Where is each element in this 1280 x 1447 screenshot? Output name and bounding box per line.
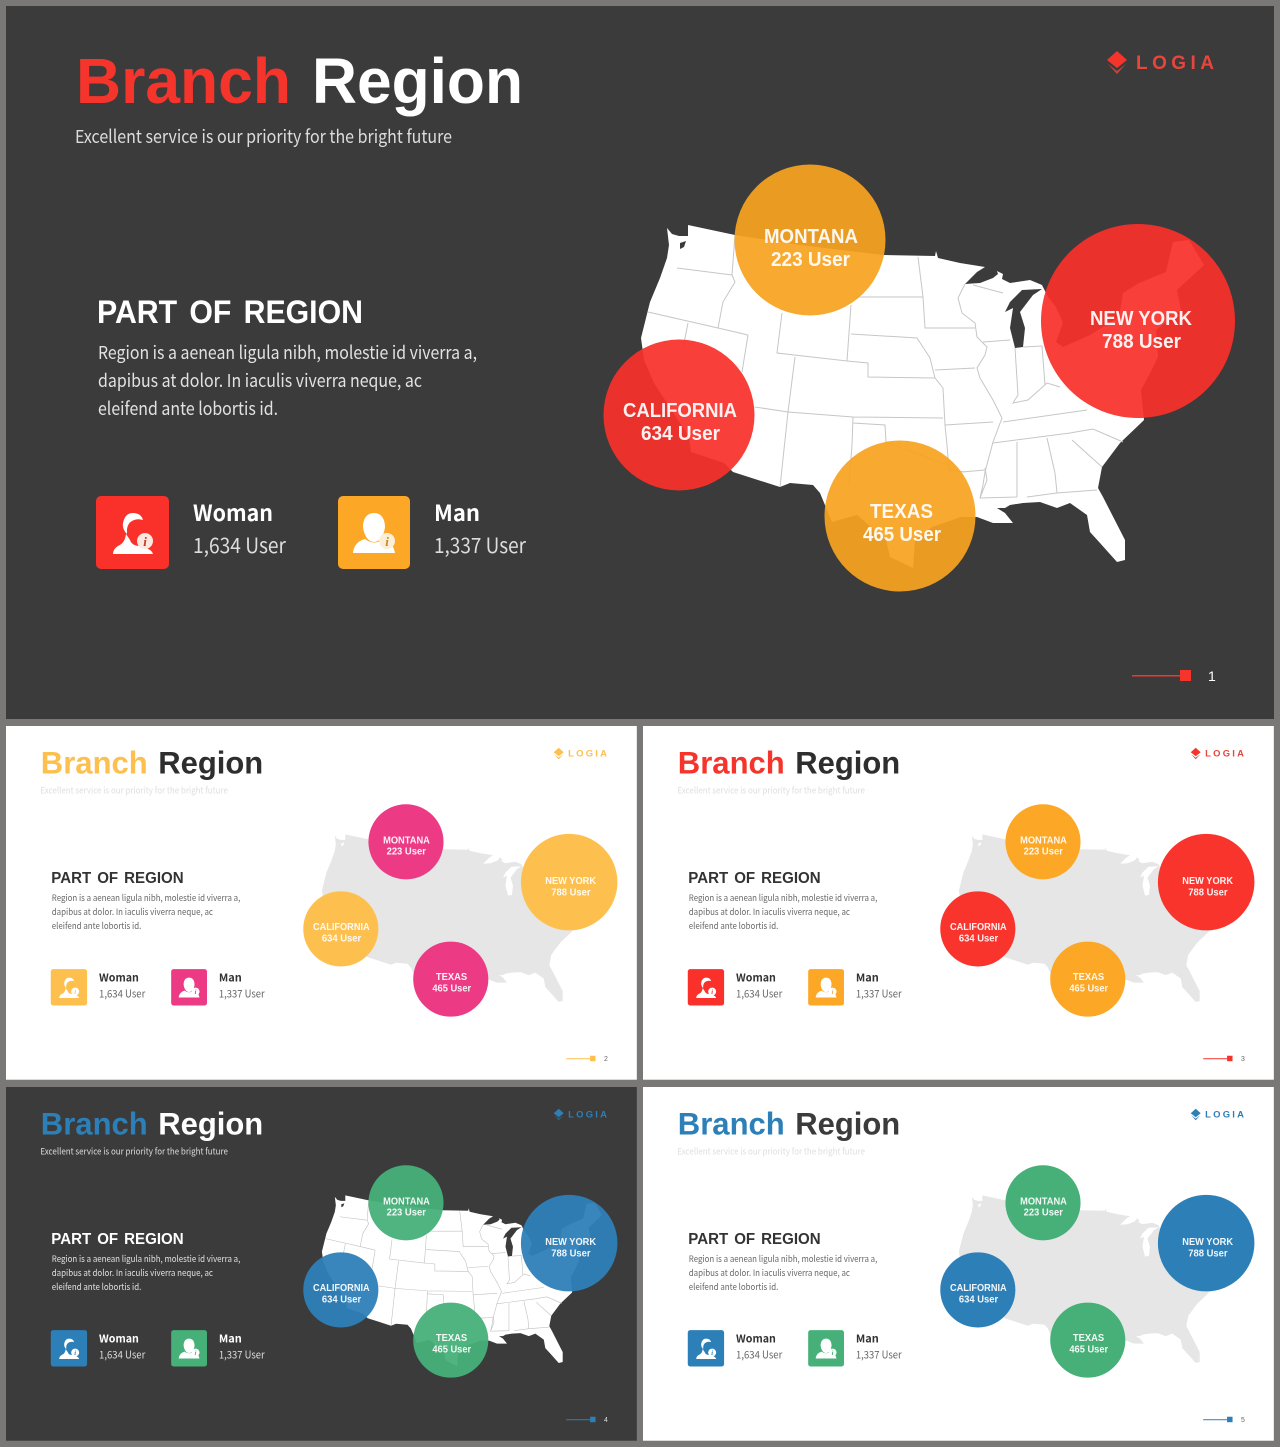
stat: woman bbox=[736, 1331, 783, 1363]
icon: man bbox=[338, 496, 410, 569]
icon: man bbox=[171, 1330, 207, 1366]
title: Branch bbox=[76, 45, 291, 117]
bubble: montana bbox=[1005, 1165, 1081, 1240]
logo: LOGIA bbox=[568, 1110, 607, 1121]
bubble: california: 634 User bbox=[959, 933, 998, 944]
bubble: new york bbox=[521, 1195, 617, 1291]
bubble: montana: MONTANA bbox=[764, 225, 858, 248]
bubble: california: 634 User bbox=[322, 1294, 361, 1305]
body text: eleifend ante lobortis id. bbox=[689, 1280, 778, 1293]
logo bbox=[1191, 748, 1244, 760]
panel: slide 3 red and orange bbox=[643, 726, 1274, 1080]
icon: man bbox=[808, 1330, 844, 1366]
page marker: 3 bbox=[1241, 1056, 1245, 1063]
bubble: california: 634 User bbox=[641, 422, 720, 445]
bubble: texas: TEXAS bbox=[870, 500, 933, 523]
bubble: new york bbox=[1158, 834, 1254, 930]
map: united states bbox=[959, 834, 1239, 1005]
bubble: texas: TEXAS bbox=[436, 972, 467, 983]
icon: woman: i bbox=[711, 989, 713, 996]
bubble: new york: NEW YORK bbox=[545, 876, 597, 887]
stat: man bbox=[219, 1331, 266, 1363]
bubble: new york: 788 User bbox=[1188, 1249, 1228, 1260]
bubble: texas bbox=[413, 942, 488, 1017]
bubble: california bbox=[604, 340, 754, 490]
subtitle: Excellent service is our priority for the bright future bbox=[75, 123, 452, 149]
icon: woman: i bbox=[74, 989, 76, 996]
logo: LOGIA bbox=[1136, 53, 1214, 74]
logo: LOGIA bbox=[1205, 749, 1244, 760]
stat: woman bbox=[99, 970, 146, 1002]
bubble: new york bbox=[521, 834, 617, 930]
bubble: new york: NEW YORK bbox=[1182, 1237, 1234, 1248]
bubble: montana: MONTANA bbox=[1020, 835, 1067, 846]
bubble: texas: TEXAS bbox=[436, 1333, 467, 1344]
bubble: texas: 465 User bbox=[863, 523, 941, 546]
bubble: montana: MONTANA bbox=[1020, 1196, 1067, 1207]
stat: man bbox=[219, 970, 266, 1002]
logo: LOGIA bbox=[568, 749, 607, 760]
bubble: new york: 788 User bbox=[551, 1249, 591, 1260]
bubble: texas bbox=[413, 1303, 488, 1378]
page marker: 4 bbox=[604, 1417, 608, 1424]
stat: man bbox=[856, 1331, 903, 1363]
heading: part of region: PART OF REGION bbox=[97, 294, 363, 330]
icon: woman bbox=[688, 1330, 724, 1366]
body text: Region is a aenean ligula nibh, molestie id viverra a, bbox=[52, 891, 240, 904]
title: Region bbox=[795, 745, 900, 781]
bubble: california bbox=[940, 891, 1015, 966]
stat: woman: 1,634 User bbox=[736, 987, 783, 1002]
stat: man: 1,337 User bbox=[219, 1348, 266, 1363]
logo bbox=[554, 1109, 607, 1121]
bubble: montana: 223 User bbox=[771, 248, 850, 271]
bubble: california: 634 User bbox=[322, 933, 361, 944]
icon: man: i bbox=[832, 1350, 834, 1357]
stat: man: 1,337 User bbox=[856, 1348, 903, 1363]
bubble: montana bbox=[1005, 804, 1081, 879]
page marker bbox=[1132, 668, 1216, 684]
stat: man: 1,337 User bbox=[219, 987, 266, 1002]
bubble: new york bbox=[1041, 224, 1235, 418]
stat: woman: 1,634 User bbox=[193, 530, 287, 560]
panel: slide 5 light blue and green bbox=[643, 1087, 1274, 1441]
bubble: california bbox=[940, 1252, 1015, 1327]
body text: eleifend ante lobortis id. bbox=[52, 1280, 141, 1293]
bubble: texas: 465 User bbox=[1069, 1345, 1108, 1356]
stat: woman bbox=[99, 1331, 146, 1363]
title bbox=[41, 1106, 263, 1142]
title: Region bbox=[158, 1106, 263, 1142]
body text: Region is a aenean ligula nibh, molestie id viverra a, bbox=[98, 339, 477, 365]
subtitle: Excellent service is our priority for the bright future bbox=[677, 1145, 865, 1158]
stat: woman bbox=[736, 970, 783, 1002]
bubble: new york: NEW YORK bbox=[1090, 307, 1192, 330]
map: united states bbox=[322, 1195, 602, 1366]
body text: Region is a aenean ligula nibh, molestie id viverra a, bbox=[689, 1252, 877, 1265]
icon: man: i bbox=[195, 1350, 197, 1357]
page marker bbox=[1203, 1417, 1245, 1424]
stat: woman bbox=[193, 496, 287, 560]
logo bbox=[1107, 51, 1214, 74]
stat: woman: Woman bbox=[736, 970, 776, 986]
bubble: texas: TEXAS bbox=[1073, 972, 1104, 983]
page marker bbox=[1203, 1056, 1245, 1063]
body text bbox=[52, 1252, 240, 1293]
icon: woman bbox=[96, 496, 169, 569]
panel: slide 1 large dark bbox=[6, 6, 1274, 719]
title: Branch bbox=[41, 745, 148, 781]
icon: man bbox=[808, 969, 844, 1005]
heading: part of region: PART OF REGION bbox=[688, 870, 821, 887]
stat: man: Man bbox=[434, 496, 480, 528]
icon: woman bbox=[51, 1330, 87, 1366]
stat: man: Man bbox=[219, 970, 242, 986]
panel: slide 2 yellow and pink bbox=[6, 726, 637, 1080]
icon: woman: i bbox=[143, 534, 147, 549]
stat: woman: 1,634 User bbox=[736, 1348, 783, 1363]
bubble: texas: 465 User bbox=[432, 984, 471, 995]
logo bbox=[1191, 1109, 1244, 1121]
body text bbox=[689, 891, 877, 932]
stat: man: Man bbox=[856, 970, 879, 986]
icon: woman bbox=[688, 969, 724, 1005]
bubble: new york: NEW YORK bbox=[1182, 876, 1234, 887]
body text: eleifend ante lobortis id. bbox=[52, 919, 141, 932]
heading: part of region: PART OF REGION bbox=[51, 870, 184, 887]
bubble: montana bbox=[368, 804, 444, 879]
bubble: california: CALIFORNIA bbox=[313, 1283, 370, 1294]
body text: dapibus at dolor. In iaculis viverra neque, ac bbox=[689, 905, 850, 918]
icon: woman: i bbox=[74, 1350, 76, 1357]
body text bbox=[98, 339, 477, 421]
body text bbox=[689, 1252, 877, 1293]
bubble: california bbox=[303, 1252, 378, 1327]
subtitle: Excellent service is our priority for the bright future bbox=[677, 784, 865, 797]
title: Branch bbox=[678, 745, 785, 781]
bubble: new york: NEW YORK bbox=[545, 1237, 597, 1248]
icon: man: i bbox=[195, 989, 197, 996]
bubble: texas bbox=[1050, 942, 1125, 1017]
page marker bbox=[566, 1417, 608, 1424]
bubble: montana: MONTANA bbox=[383, 1196, 430, 1207]
stat: woman: 1,634 User bbox=[99, 1348, 146, 1363]
body text: eleifend ante lobortis id. bbox=[98, 395, 278, 421]
title: Branch bbox=[678, 1106, 785, 1142]
bubble: california bbox=[303, 891, 378, 966]
bubble: montana bbox=[734, 164, 886, 316]
bubble: california: CALIFORNIA bbox=[950, 922, 1007, 933]
body text: Region is a aenean ligula nibh, molestie id viverra a, bbox=[689, 891, 877, 904]
bubble: california: 634 User bbox=[959, 1294, 998, 1305]
bubble: texas bbox=[824, 440, 976, 592]
body text bbox=[52, 891, 240, 932]
page marker: 1 bbox=[1208, 668, 1216, 684]
bubble: california: CALIFORNIA bbox=[313, 922, 370, 933]
body text: dapibus at dolor. In iaculis viverra neque, ac bbox=[98, 367, 422, 393]
subtitle: Excellent service is our priority for the bright future bbox=[40, 784, 228, 797]
heading: part of region: PART OF REGION bbox=[688, 1231, 821, 1248]
body text: Region is a aenean ligula nibh, molestie id viverra a, bbox=[52, 1252, 240, 1265]
title bbox=[41, 745, 263, 781]
stat: man bbox=[434, 496, 527, 560]
logo bbox=[554, 748, 607, 760]
page marker: 5 bbox=[1241, 1417, 1245, 1424]
title: Region bbox=[795, 1106, 900, 1142]
body text: dapibus at dolor. In iaculis viverra neque, ac bbox=[52, 1266, 213, 1279]
bubble: montana: MONTANA bbox=[383, 835, 430, 846]
bubble: montana: 223 User bbox=[387, 847, 426, 858]
body text: eleifend ante lobortis id. bbox=[689, 919, 778, 932]
page marker: 2 bbox=[604, 1056, 608, 1063]
bubble: montana: 223 User bbox=[1024, 847, 1063, 858]
map: united states bbox=[641, 225, 1204, 568]
bubble: texas: 465 User bbox=[432, 1345, 471, 1356]
stat: man: 1,337 User bbox=[434, 530, 527, 560]
panel: slide 4 dark blue and green bbox=[6, 1087, 637, 1441]
body text: dapibus at dolor. In iaculis viverra neque, ac bbox=[689, 1266, 850, 1279]
map: united states bbox=[322, 834, 602, 1005]
heading: part of region: PART OF REGION bbox=[51, 1231, 184, 1248]
icon: woman: i bbox=[711, 1350, 713, 1357]
bubble: california: CALIFORNIA bbox=[950, 1283, 1007, 1294]
title bbox=[76, 45, 523, 117]
map: united states bbox=[959, 1195, 1239, 1366]
stat: woman: Woman bbox=[99, 970, 139, 986]
icon: man: i bbox=[832, 989, 834, 996]
bubble: texas bbox=[1050, 1303, 1125, 1378]
stat: woman: 1,634 User bbox=[99, 987, 146, 1002]
title bbox=[678, 1106, 900, 1142]
title bbox=[678, 745, 900, 781]
stat: man: Man bbox=[856, 1331, 879, 1347]
bubble: new york bbox=[1158, 1195, 1254, 1291]
page marker bbox=[566, 1056, 608, 1063]
bubble: texas: 465 User bbox=[1069, 984, 1108, 995]
bubble: montana: 223 User bbox=[387, 1208, 426, 1219]
logo: LOGIA bbox=[1205, 1110, 1244, 1121]
bubble: montana bbox=[368, 1165, 444, 1240]
bubble: california: CALIFORNIA bbox=[623, 399, 737, 422]
bubble: new york: 788 User bbox=[1188, 888, 1228, 899]
bubble: new york: 788 User bbox=[551, 888, 591, 899]
title: Region bbox=[312, 45, 523, 117]
stat: man: 1,337 User bbox=[856, 987, 903, 1002]
stat: woman: Woman bbox=[99, 1331, 139, 1347]
stat: woman: Woman bbox=[193, 496, 273, 528]
stat: man bbox=[856, 970, 903, 1002]
body text: dapibus at dolor. In iaculis viverra neque, ac bbox=[52, 905, 213, 918]
bubble: texas: TEXAS bbox=[1073, 1333, 1104, 1344]
title: Branch bbox=[41, 1106, 148, 1142]
stat: woman: Woman bbox=[736, 1331, 776, 1347]
icon: woman bbox=[51, 969, 87, 1005]
stat: man: Man bbox=[219, 1331, 242, 1347]
bubble: montana: 223 User bbox=[1024, 1208, 1063, 1219]
bubble: new york: 788 User bbox=[1102, 330, 1181, 353]
icon: man: i bbox=[385, 534, 389, 549]
subtitle: Excellent service is our priority for the bright future bbox=[40, 1145, 228, 1158]
title: Region bbox=[158, 745, 263, 781]
icon: man bbox=[171, 969, 207, 1005]
